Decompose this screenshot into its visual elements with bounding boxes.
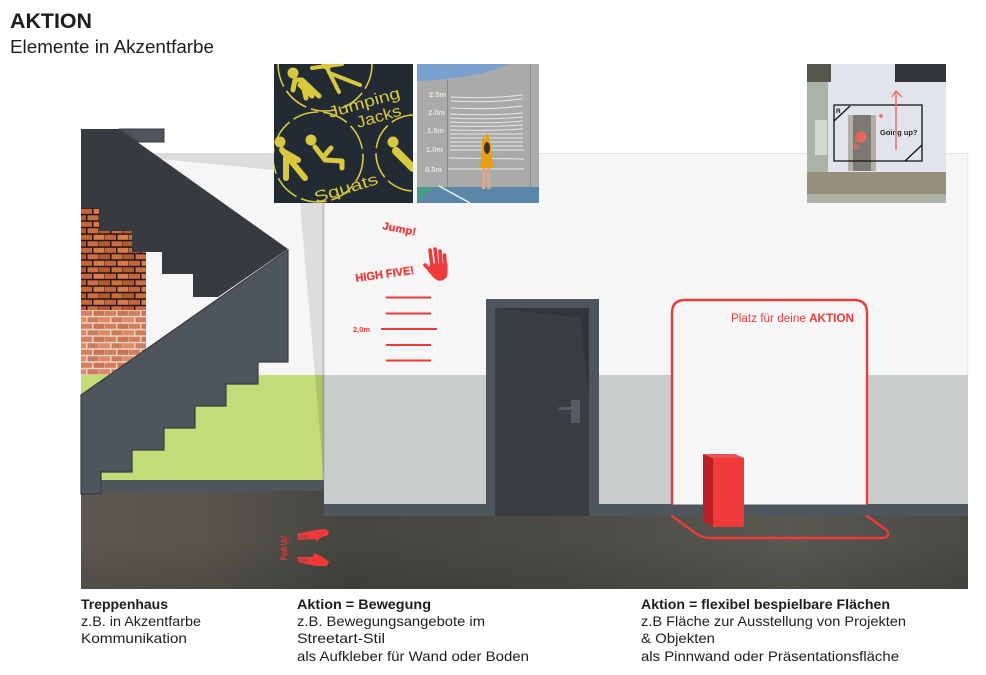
photo lettering: Jumping [326, 85, 402, 122]
red plinth [703, 454, 744, 527]
photo: measuring wall: 1.0m [426, 145, 443, 154]
height scale [381, 298, 437, 360]
icon: left hand print [297, 529, 329, 542]
lower flight [81, 250, 288, 494]
upper landing cap [120, 129, 164, 142]
wall graphics: jump, high five [353, 220, 447, 360]
caption: Treppenhaus: z.B. in Akzentfarbe [81, 613, 201, 629]
caption: Aktion = flexibel bespielbare Flächen [641, 596, 906, 664]
caption: Aktion = Bewegung: Aktion = Bewegung [297, 596, 431, 612]
brick wall [81, 208, 146, 375]
sign frame [834, 105, 922, 161]
label: Platz für deine AKTION: Platz für deine AKTION [731, 313, 854, 325]
action frame on wall [672, 300, 888, 538]
photo: measuring wall: 0.5m [425, 165, 442, 174]
pictogram figures [275, 59, 413, 178]
icon: red hand [425, 249, 447, 280]
photo: measuring wall: 2.0m [428, 108, 445, 117]
photo: measuring wall: 1.5m [427, 126, 444, 135]
caption: Aktion = Bewegung: z.B. Bewegungsangebote im [297, 613, 485, 629]
caption: Aktion = flexibel bespielbare Flächen: als Pinnwand oder Präsentationsfläche [641, 648, 899, 664]
door handle [559, 400, 580, 423]
photo: elevator wall: R [836, 108, 841, 115]
label: 2,0m: 2,0m [353, 325, 370, 334]
caption: Aktion = flexibel bespielbare Flächen: z.B Fläche zur Ausstellung von Projekten [641, 613, 906, 629]
photo: measuring wall [417, 64, 539, 203]
caption: Aktion = flexibel bespielbare Flächen: Aktion = flexibel bespielbare Flächen [641, 596, 890, 612]
scene: wall and floor background [81, 153, 968, 589]
label: Push Up: Push Up! [279, 536, 289, 560]
caption: Aktion = Bewegung: als Aufkleber für Wand oder Boden [297, 648, 529, 664]
caption: Treppenhaus: Treppenhaus [81, 596, 168, 612]
subtitle: Elemente in Akzentfarbe [10, 37, 214, 57]
caption: Aktion = Bewegung [297, 596, 529, 664]
label: High five: HIGH FIVE! [355, 265, 415, 285]
photo: elevator wall: Going up? [880, 128, 918, 137]
elevator [853, 115, 871, 171]
floor graphics: push up [279, 529, 329, 566]
photo: measuring wall: 2.5m [429, 90, 446, 99]
title: AKTION [10, 10, 92, 33]
photo: elevator wall [807, 64, 946, 203]
upper flight [81, 129, 288, 297]
caption: Aktion = flexibel bespielbare Flächen: & Objekten [641, 630, 715, 646]
red marks [856, 132, 866, 142]
caption: Treppenhaus: Kommunikation [81, 630, 187, 646]
projection beams from photos [153, 153, 324, 480]
label: Jump: Jump! [381, 220, 417, 238]
photo: floor exercises: Squats [312, 171, 380, 207]
height lines [448, 95, 524, 169]
photo: floor exercises: Jacks [354, 103, 403, 132]
photo: floor exercises [274, 64, 413, 203]
icon: right hand print [297, 553, 329, 566]
staircase [81, 129, 288, 494]
caption: Treppenhaus [81, 596, 201, 646]
door [486, 299, 599, 516]
caption: Aktion = Bewegung: Streetart-Stil [297, 630, 385, 646]
child figure [479, 134, 493, 168]
